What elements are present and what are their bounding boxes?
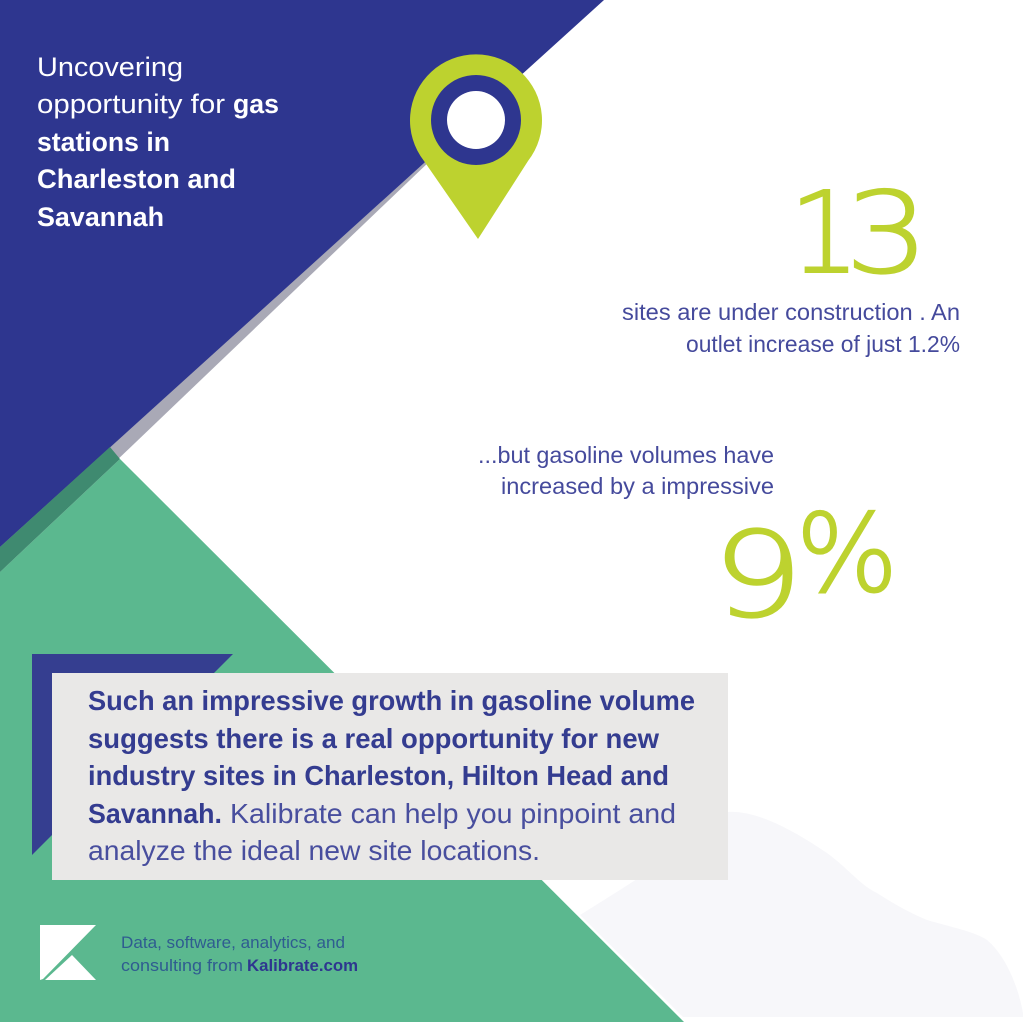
big number 9 percent [712,492,898,645]
footer text: Kalibrate.com [247,957,358,975]
callout box: suggests there is a real opportunity for new [88,723,660,754]
footer text: consulting from [121,957,243,975]
footer text [121,934,358,975]
dark overlap band [0,447,120,572]
callout box: industry sites in Charleston, Hilton Head and [88,760,669,791]
text: sites under construction [622,299,960,357]
title: Savannah [37,202,164,232]
callout box: Savannah. [88,798,222,829]
green triangle [0,459,684,1022]
background blob [580,812,1023,1017]
title: stations in [37,127,170,157]
text: sites under construction: outlet increase of just 1.2% [686,331,960,357]
big number 13: 1 [789,169,860,299]
title [37,52,279,232]
callout box: Such an impressive growth in gasoline volume [88,685,695,716]
icon: map pin [410,54,542,239]
text: gasoline volumes [478,442,774,499]
title: gas [233,89,279,119]
blue triangle [0,0,604,547]
gray shadow band [0,94,500,572]
callout box [52,673,728,880]
callout box: Kalibrate can help you pinpoint and [230,798,676,829]
title: opportunity for [37,89,225,119]
text: gasoline volumes: ...but gasoline volumes have [478,442,774,468]
big number 9 percent: % [796,492,898,617]
title: Charleston and [37,164,236,194]
big number 13 [789,168,929,299]
footer text: Data, software, analytics, and [121,934,345,952]
text: sites under construction: sites are under construction . An [622,299,960,325]
blue corner accent [32,654,233,855]
big number 9 percent: 9 [712,508,804,645]
text: gasoline volumes: increased by a impressive [501,473,774,499]
callout box: analyze the ideal new site locations. [88,835,540,866]
icon: Kalibrate logo [40,925,96,980]
big number 13: 3 [845,168,929,299]
title: Uncovering [37,52,183,82]
